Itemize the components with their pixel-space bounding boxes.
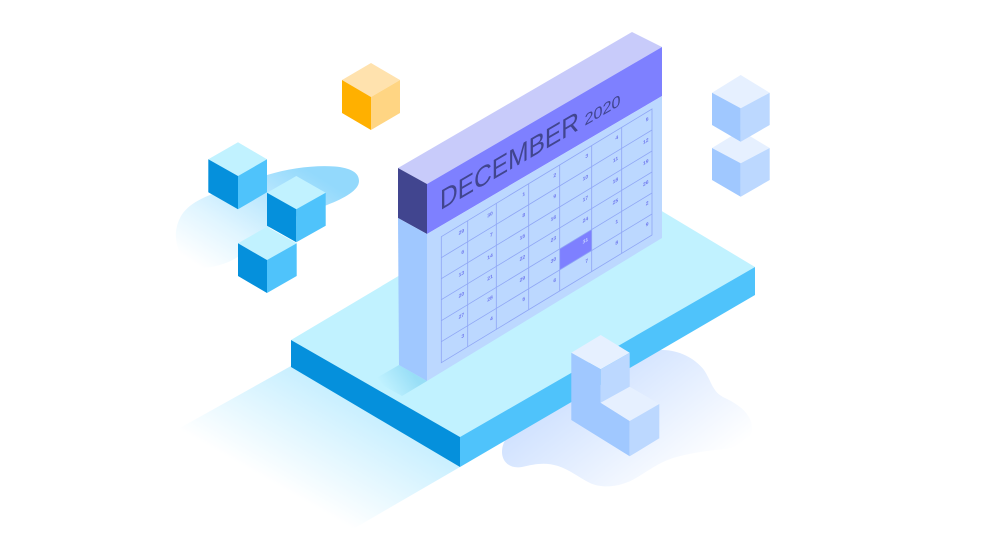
calendar dates: 16 xyxy=(551,214,556,223)
calendar dates: 2 xyxy=(553,172,556,180)
calendar dates: 1 xyxy=(615,219,618,226)
cube: pale right lower xyxy=(712,130,770,197)
calendar header front xyxy=(427,47,662,234)
highlighted date cell xyxy=(560,230,592,270)
calendar dates: 8 xyxy=(522,212,525,219)
calendar dates: 29 xyxy=(520,275,525,284)
calendar dates: 14 xyxy=(487,253,493,262)
calendar dates: 5 xyxy=(646,116,648,124)
year: 2020 xyxy=(584,90,620,130)
calendar dates: 23 xyxy=(551,235,556,244)
calendar dates: 7 xyxy=(490,232,493,239)
calendar dates: 31 xyxy=(583,237,588,246)
calendar dates: 29 xyxy=(459,228,464,237)
calendar dates: 1 xyxy=(522,191,525,198)
cube: blue bottom xyxy=(238,227,297,293)
calendar dates: 9 xyxy=(646,221,648,229)
month title: DECEMBER xyxy=(440,106,579,217)
calendar dates: 26 xyxy=(643,179,648,188)
calendar dates: 9 xyxy=(553,193,556,201)
platform right side xyxy=(460,267,755,467)
L-shaped block xyxy=(571,335,659,456)
calendar dates: 6 xyxy=(461,249,464,256)
calendar dates: 27 xyxy=(459,312,464,321)
calendar top face xyxy=(398,32,662,184)
calendar dates: 11 xyxy=(613,156,618,165)
cube: orange xyxy=(342,63,400,130)
calendar dates xyxy=(459,116,648,342)
calendar dates: 25 xyxy=(613,198,618,207)
calendar dates: 21 xyxy=(487,274,493,283)
platform top surface xyxy=(291,165,755,437)
calendar dates: 22 xyxy=(520,254,525,263)
calendar dates: 30 xyxy=(487,211,493,220)
floor shadow xyxy=(178,366,460,529)
calendar dates: 2 xyxy=(646,200,648,208)
calendar dates: 4 xyxy=(615,135,618,142)
calendar dates: 17 xyxy=(583,195,588,204)
calendar dates: 13 xyxy=(459,270,464,279)
calendar body side xyxy=(398,218,427,381)
calendar dates: 3 xyxy=(585,153,588,160)
calendar dates: 6 xyxy=(553,277,556,285)
calendar dates: 30 xyxy=(551,256,556,265)
calendar dates: 5 xyxy=(522,296,525,303)
calendar dates: 4 xyxy=(490,316,493,323)
calendar dates: 20 xyxy=(459,291,464,300)
calendar dates: 15 xyxy=(520,233,525,242)
calendar grid xyxy=(441,109,652,363)
background blob: right xyxy=(502,350,752,486)
calendar dates: 3 xyxy=(461,333,464,340)
calendar dates: 7 xyxy=(585,258,588,265)
calendar dates: 19 xyxy=(643,158,648,167)
calendar dates: 12 xyxy=(643,137,648,146)
cube: blue top left xyxy=(208,142,267,209)
calendar dates: 24 xyxy=(583,216,588,225)
calendar header dark side xyxy=(398,168,427,234)
platform left side xyxy=(291,340,460,467)
calendar dates: 18 xyxy=(613,177,618,186)
calendar dates: 8 xyxy=(615,240,618,247)
calendar shadow on platform xyxy=(373,365,427,396)
cube: pale right upper xyxy=(712,75,770,142)
calendar dates: 28 xyxy=(487,295,493,304)
platform xyxy=(291,165,755,467)
calendar dates: 10 xyxy=(583,174,588,183)
calendar xyxy=(398,32,662,381)
background blob: left xyxy=(176,166,359,268)
cube: blue middle xyxy=(267,176,326,242)
calendar body front xyxy=(427,96,662,381)
